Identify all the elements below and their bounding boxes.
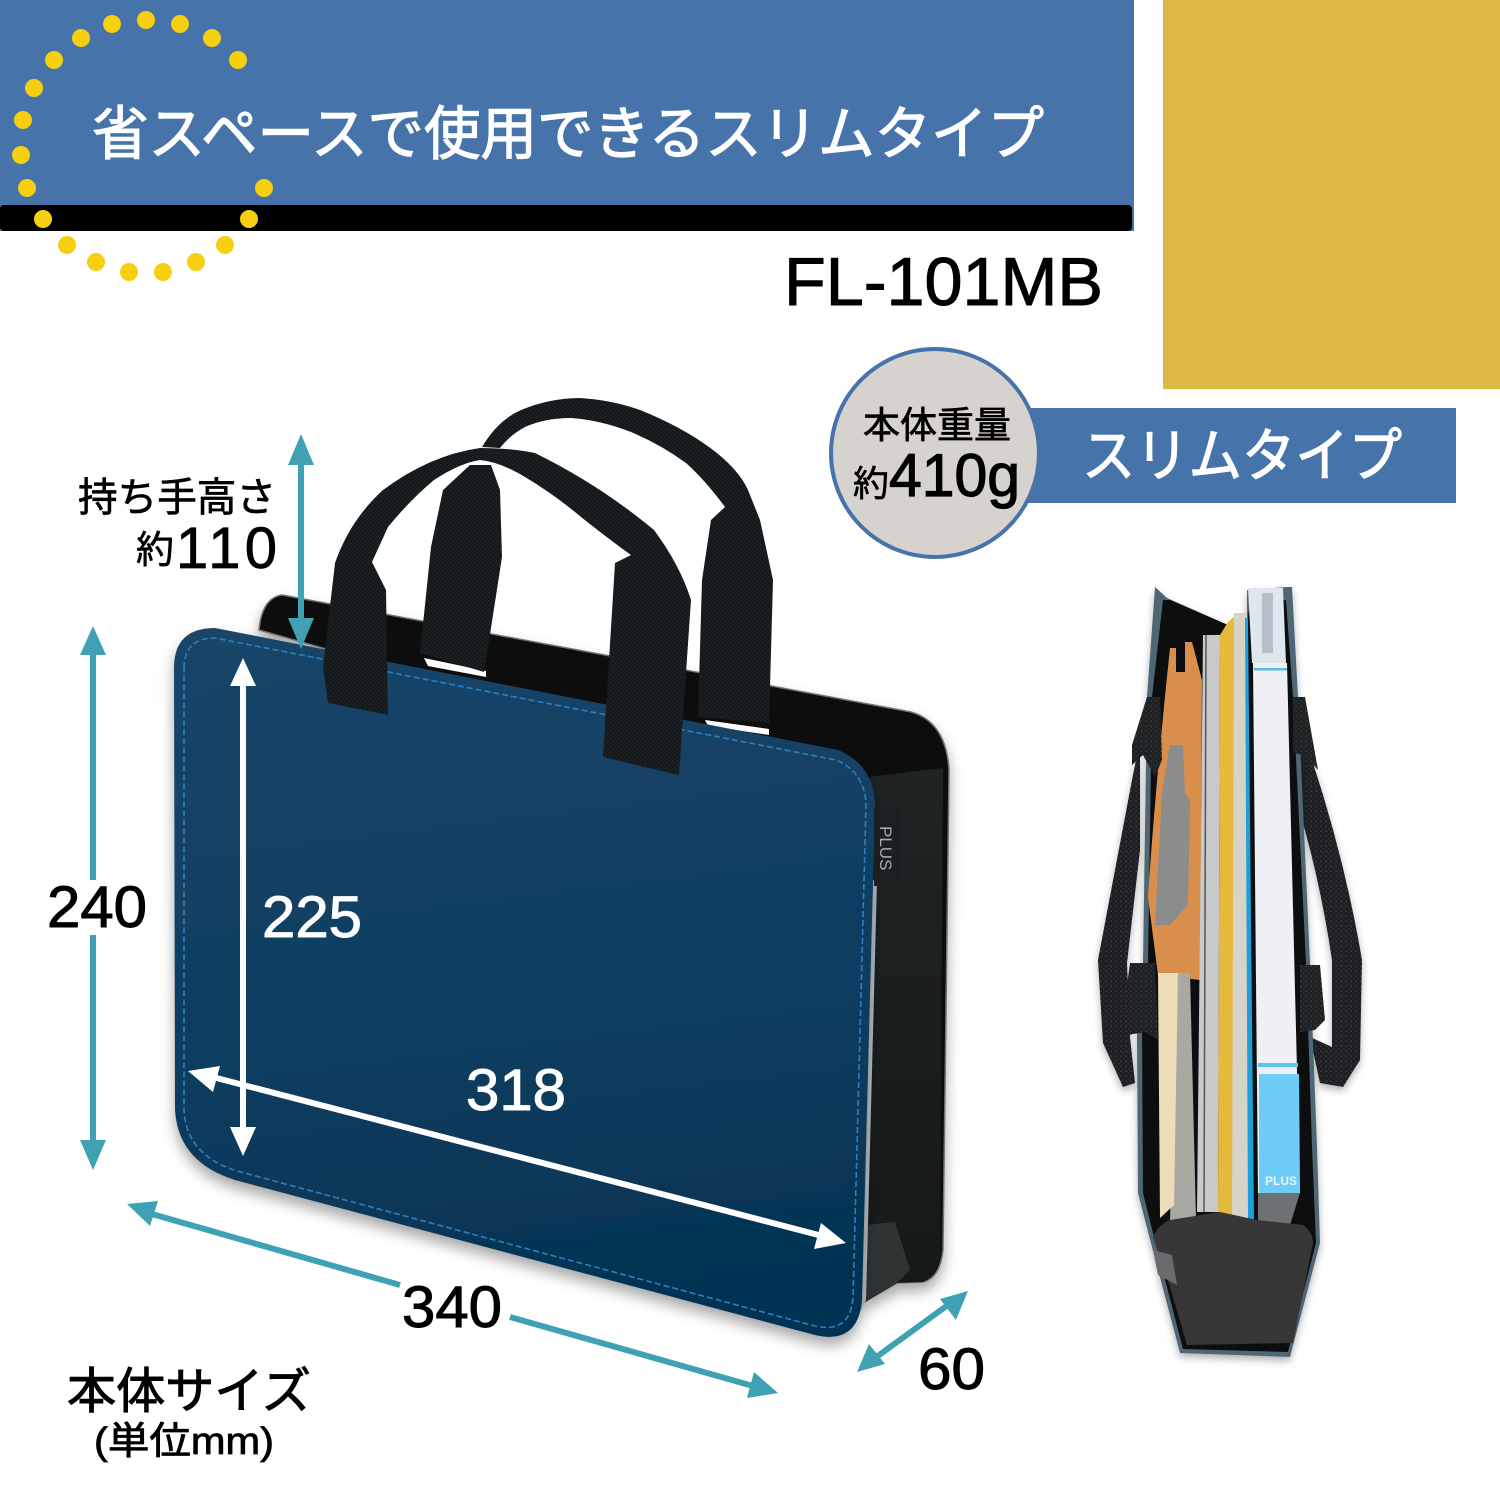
binder: PLUS (1265, 1174, 1297, 1188)
binder (1248, 588, 1300, 1225)
weight badge: 約 (853, 463, 889, 504)
dimension arrows (teal) (80, 434, 968, 1398)
blue folder (1245, 618, 1254, 1220)
front handle (323, 448, 691, 775)
dimension labels: 225 (262, 885, 362, 950)
weight badge: 410g (889, 442, 1020, 509)
side tag (1153, 1250, 1177, 1285)
slim type label (1020, 408, 1456, 503)
silver pages edge (860, 880, 877, 1312)
colour swatch (1163, 0, 1500, 389)
handle slots (424, 658, 769, 735)
handle height label: 約 (136, 530, 174, 572)
bag body (1137, 587, 1320, 1357)
handle height label (78, 476, 277, 581)
dimension labels (47, 875, 985, 1402)
340 width arrow (127, 1201, 778, 1398)
header band (0, 0, 1134, 231)
PLUS tag (874, 808, 899, 886)
318 width arrow (188, 1066, 846, 1249)
interior (1142, 600, 1316, 1352)
back handle (482, 398, 760, 520)
decorative dot ring (12, 11, 273, 281)
dimension labels: 240 (47, 875, 147, 940)
handle height arrow (288, 434, 314, 649)
yellow folder (1218, 615, 1236, 1218)
handle height label: 110 (176, 516, 277, 581)
60 depth arrow (857, 1291, 968, 1372)
PLUS tag: PLUS (876, 826, 895, 870)
weight badge (831, 349, 1039, 557)
body size caption: 本体サイズ (67, 1365, 311, 1419)
felt base (1153, 1212, 1313, 1345)
240 height arrow (80, 626, 106, 1170)
dimension labels: 318 (466, 1058, 566, 1123)
handle loops (1125, 697, 1325, 1040)
laptop (1197, 635, 1220, 1212)
notebook (1158, 973, 1196, 1220)
stitching (184, 638, 866, 1327)
bag: side view with contents (1098, 587, 1362, 1357)
dimension arrows (white) (188, 658, 846, 1249)
pouch opening (1155, 745, 1190, 925)
title: 省スペースで使用できるスリムタイプ (92, 102, 1044, 167)
inner felt gusset (863, 768, 943, 1303)
body size caption (67, 1365, 311, 1463)
orange pouch (1148, 642, 1202, 980)
dimension labels: 60 (918, 1337, 985, 1402)
grey paper (1232, 613, 1250, 1218)
225 height arrow (230, 658, 256, 1156)
front panel (174, 628, 875, 1337)
body size caption: (単位mm) (94, 1421, 274, 1463)
back handle straps (420, 465, 502, 672)
slim type label: スリムタイプ (1082, 424, 1402, 489)
felt fold highlight (866, 1222, 910, 1300)
side handles (1098, 740, 1362, 1087)
weight badge: 本体重量 (863, 405, 1011, 446)
back panel (259, 595, 949, 1303)
handle height label: 持ち手高さ (78, 476, 276, 520)
model number: FL-101MB (784, 244, 1103, 320)
dimension labels: 340 (402, 1275, 502, 1340)
bag: main product image (174, 398, 949, 1337)
